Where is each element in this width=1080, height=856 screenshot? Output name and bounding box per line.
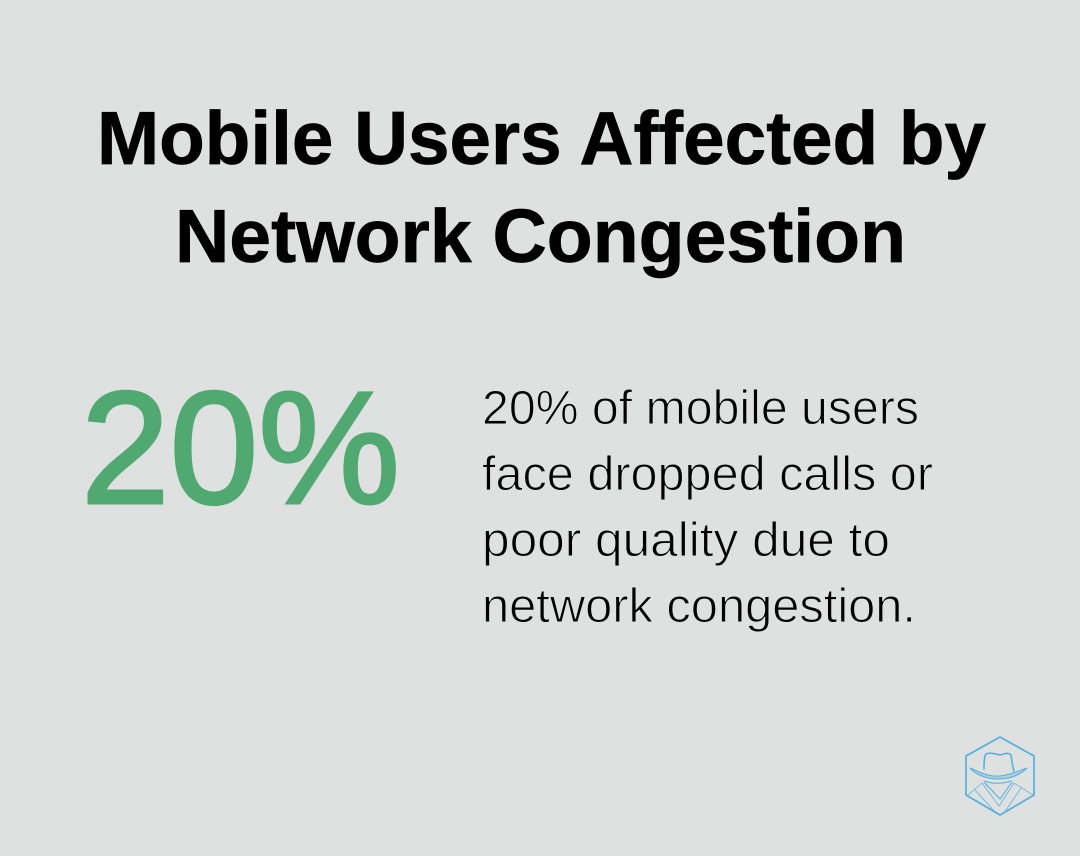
description text: network congestion.	[482, 580, 916, 633]
description text: 20% of mobile users	[482, 382, 919, 435]
description text: face dropped calls or	[482, 448, 933, 501]
description text: poor quality due to	[482, 514, 890, 567]
title	[97, 96, 986, 278]
title: Mobile Users Affected by	[97, 96, 986, 180]
icon: hexagon logo with hat and coat	[966, 737, 1034, 815]
description text	[482, 382, 933, 633]
big statistic: 20%: 20%	[81, 358, 400, 537]
title: Network Congestion	[175, 194, 906, 278]
